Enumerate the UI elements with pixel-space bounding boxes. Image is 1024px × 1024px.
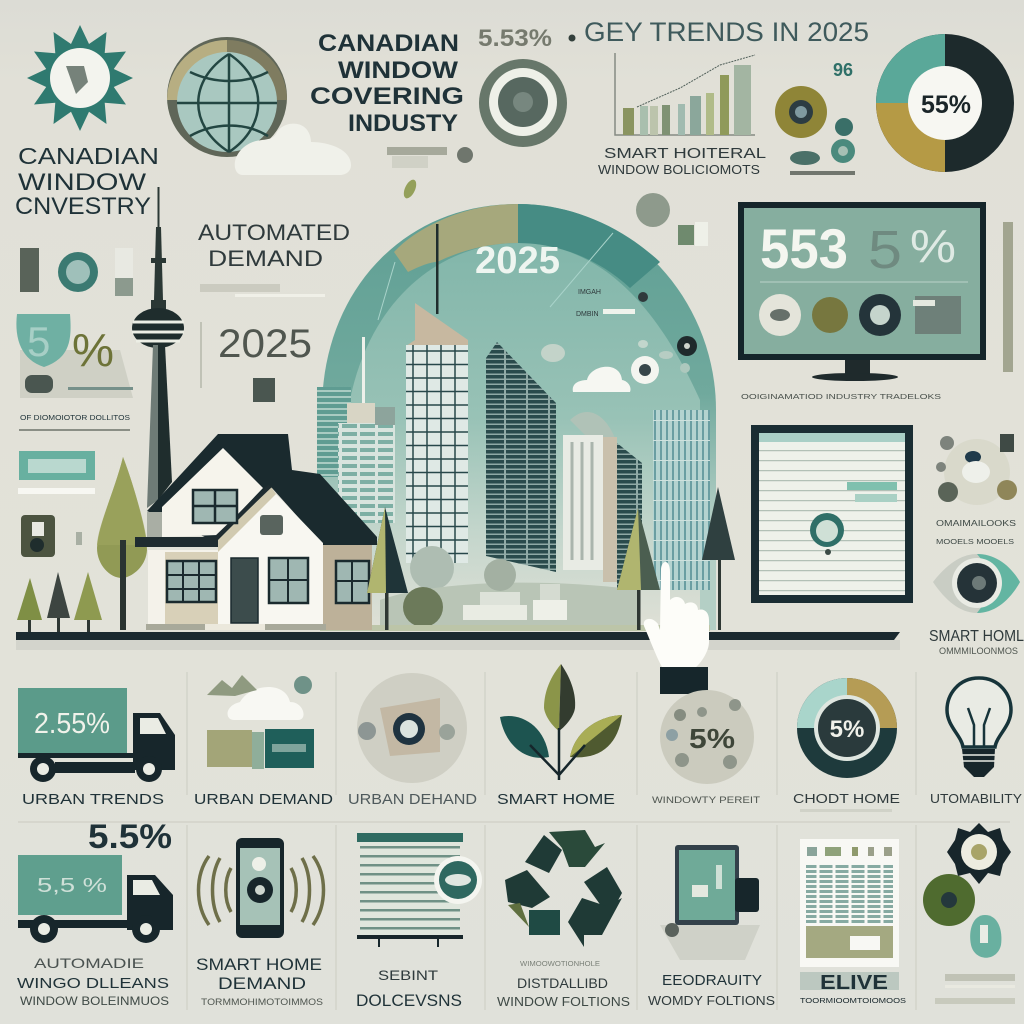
pie chart 55% bbox=[876, 34, 1014, 172]
caption: smart homl: OMMMILOONMOS bbox=[939, 646, 1018, 656]
caption: smart hotel window bbox=[598, 145, 766, 177]
heading: canadian window covering industy bbox=[310, 30, 464, 137]
heading: canadian window covering industy: WINDOW bbox=[338, 57, 458, 84]
row 2 cell: truck 5.5%: WINDOW BOLEINMUOS bbox=[20, 994, 169, 1008]
row 2 cell: truck 5.5%: 5.5% bbox=[88, 818, 172, 856]
small gear icons: 96 bbox=[833, 60, 853, 80]
window blind panel bbox=[755, 429, 909, 599]
row 2 cell: tablet: EEODRAUITY bbox=[662, 972, 762, 989]
row 2 cell: smartphone: SMART HOME bbox=[196, 955, 322, 974]
caption: smart homl bbox=[929, 628, 1024, 656]
row 2 cell: tablet bbox=[648, 845, 775, 1008]
icon: pointing hand bbox=[644, 562, 709, 694]
row 1 cell: urban trends truck: 2.55% bbox=[34, 708, 110, 740]
dome icons bbox=[541, 292, 697, 384]
row 2 cell: truck 5.5% bbox=[17, 818, 173, 1008]
callout: 5% card bbox=[16, 314, 133, 431]
year 2025 label: 2025 bbox=[218, 322, 312, 366]
right icons: OMAIMAILOOKS bbox=[936, 519, 1016, 528]
row 1 cell: light bulb bbox=[930, 678, 1022, 806]
row 1 cell: urban demand cloud bbox=[194, 675, 333, 808]
heading: automated demand bbox=[198, 220, 350, 297]
row 2 cell: recycle: DISTDALLIBD bbox=[517, 975, 608, 991]
heading: canadian window covering industy: CANADIAN bbox=[318, 30, 459, 57]
row 2 cell: truck 5.5%: 5,5 % bbox=[37, 875, 107, 897]
side bar right of monitor bbox=[1003, 222, 1013, 372]
caption: smart hotel window: WINDOW BOLICIOMOTS bbox=[598, 162, 760, 177]
callout: 5% card: 5 bbox=[27, 318, 50, 365]
row 1 cell: urban trends truck: URBAN TRENDS bbox=[22, 791, 164, 808]
left icon row bbox=[20, 248, 133, 296]
heading: canadian window cnvestry: CANADIAN bbox=[18, 143, 159, 169]
row 2 cell: document elive bbox=[800, 839, 906, 1005]
row 1 cell: gear 5%: 5% bbox=[689, 723, 735, 754]
icon: eye bbox=[933, 554, 1020, 613]
callout: 5% card: OF DIOMOIOTOR DOLLITOS bbox=[20, 415, 130, 422]
icon: teal panel bbox=[18, 451, 95, 494]
monitor: % bbox=[910, 220, 956, 272]
caption: smart hotel window: SMART HOITERAL bbox=[604, 145, 766, 162]
heading: automated demand: DEMAND bbox=[208, 246, 323, 271]
dome: IMGAH bbox=[578, 289, 601, 296]
row 1 cell: light bulb: UTOMABILITY bbox=[930, 791, 1022, 806]
bar chart bbox=[615, 53, 755, 135]
row 2 cell: tablet: WOMDY FOLTIONS bbox=[648, 993, 775, 1008]
icon: cloud top bbox=[235, 124, 351, 175]
heading: canadian window cnvestry bbox=[15, 143, 159, 220]
row 1 cell: donut 5%: 5% bbox=[830, 716, 864, 743]
row 2 cell: truck 5.5%: AUTOMADIE bbox=[34, 955, 144, 971]
tree large left bbox=[97, 457, 147, 630]
row 2 cell: recycle: WIMOOWOTIONHOLE bbox=[520, 961, 600, 968]
small cloud in dome bbox=[573, 367, 631, 392]
icon: globe bbox=[167, 37, 287, 157]
row 1 cell: urban dehand: URBAN DEHAND bbox=[348, 791, 477, 808]
heading: canadian window cnvestry: CNVESTRY bbox=[15, 193, 151, 220]
row 1 cell: urban trends truck bbox=[18, 688, 175, 808]
small trees bbox=[17, 572, 102, 632]
small gear icons bbox=[775, 60, 855, 175]
monitor: 553 bbox=[760, 217, 848, 280]
row 2 cell: truck 5.5%: WINGO DLLEANS bbox=[17, 975, 169, 992]
monitor icons bbox=[759, 294, 961, 336]
row 2 cell: blinds: SEBINT bbox=[378, 967, 439, 983]
cn tower bbox=[132, 187, 184, 508]
trees beside house bbox=[367, 487, 735, 630]
small decorative icons center bbox=[387, 147, 708, 246]
monitor bbox=[741, 205, 983, 381]
dome year: 2025 bbox=[475, 240, 560, 282]
monitor: 5 bbox=[868, 220, 902, 280]
caption under monitor: OOIGINAMATIOD INDUSTRY TRADELOKS bbox=[741, 394, 941, 401]
row 2 cell: document elive: TOORMIOOMTOIOMOOS bbox=[800, 998, 906, 1005]
row 1 cell: donut 5%: CHODT HOME bbox=[793, 791, 900, 806]
pie chart 55%: 55% bbox=[921, 91, 971, 119]
row 2 cell: gears bbox=[923, 823, 1015, 1004]
row 1 cell: smart home leaves: SMART HOME bbox=[497, 791, 615, 808]
row 2 cell: smartphone: TORMMOHIMOTOIMMOS bbox=[201, 997, 323, 1007]
callout: 5% card: % bbox=[72, 324, 114, 376]
skyline buildings bbox=[317, 303, 710, 590]
row 2 cell: blinds: DOLCEVSNS bbox=[356, 991, 462, 1010]
house bbox=[135, 434, 377, 630]
row 2 cell: smartphone bbox=[196, 838, 324, 1007]
row 2 cell: blinds bbox=[356, 833, 482, 1010]
heading: canadian window cnvestry: WINDOW bbox=[18, 169, 146, 196]
row 2 cell: recycle: WINDOW FOLTIONS bbox=[497, 994, 630, 1009]
icon: device small bbox=[21, 515, 82, 557]
ground line bbox=[16, 632, 900, 650]
row 2 cell: smartphone: DEMAND bbox=[218, 974, 306, 993]
row 1 cell: gear 5%: WINDOWTY PEREIT bbox=[652, 795, 761, 805]
heading: gey trends in 2025: 5.53% bbox=[478, 25, 552, 52]
row 2 cell: recycle bbox=[497, 830, 630, 1009]
heading: canadian window covering industy: INDUSTY bbox=[348, 110, 458, 137]
dome bbox=[322, 204, 716, 630]
row 1 cell: gear 5% bbox=[652, 690, 761, 805]
heading: gey trends in 2025 bbox=[478, 17, 869, 52]
row 1 cell: smart home leaves bbox=[497, 664, 622, 808]
heading: canadian window covering industy: COVERING bbox=[310, 83, 464, 110]
grid dividers bbox=[18, 672, 1010, 1010]
row 2 cell: document elive: ELIVE bbox=[820, 972, 888, 994]
row 1 cell: donut 5% bbox=[793, 678, 900, 812]
icon: sun gear top left bbox=[27, 25, 133, 131]
right icons bbox=[936, 434, 1017, 546]
right icons: MOOELS MOOELS bbox=[936, 539, 1014, 546]
icon: gear lens bbox=[479, 59, 567, 147]
heading: gey trends in 2025: GEY TRENDS IN 2025 bbox=[584, 17, 869, 47]
dome: DMBIN bbox=[576, 311, 599, 318]
heading: automated demand: AUTOMATED bbox=[198, 220, 350, 245]
row 1 cell: urban demand cloud: URBAN DEMAND bbox=[194, 791, 333, 808]
year 2025 label bbox=[201, 322, 312, 402]
row 1 cell: urban dehand bbox=[348, 673, 477, 808]
foreground plaza bbox=[320, 546, 710, 631]
